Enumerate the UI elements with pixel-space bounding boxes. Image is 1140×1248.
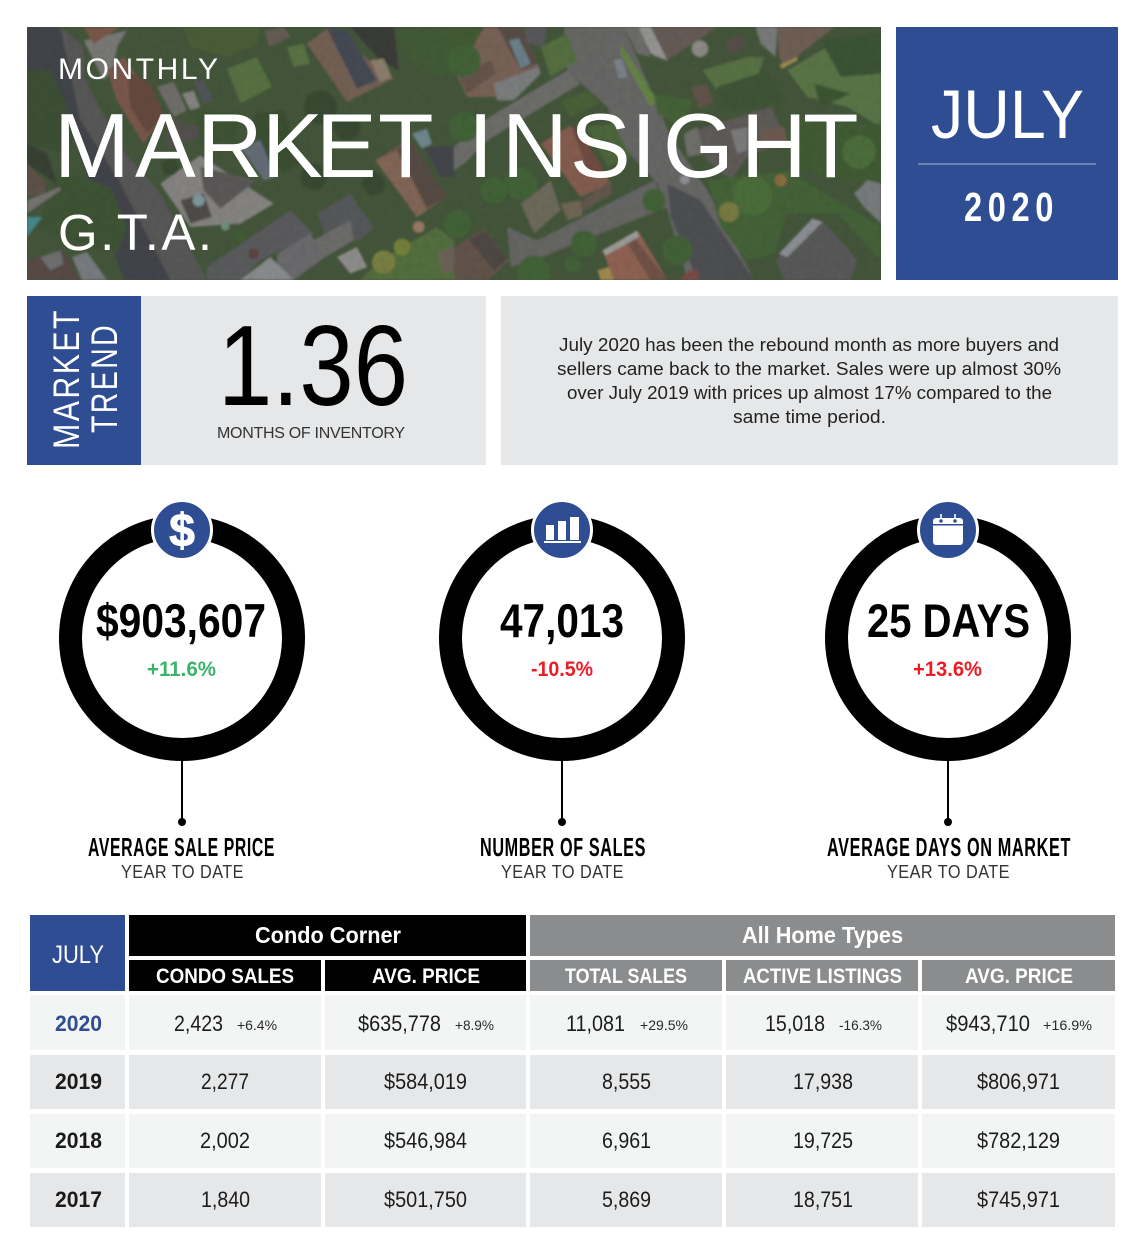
table row: 2020: $635,778 [358,1011,441,1036]
table header group: all home types [530,915,1115,991]
kpi: average days on market [827,500,1071,882]
summary paragraph [557,334,1061,427]
ring [836,526,1060,750]
sublabel: YEAR TO DATE [121,862,244,882]
table row: 2020: +8.9% [455,1017,494,1033]
table row: 2017: 1,840 [201,1187,250,1212]
summary paragraph: same time period. [733,406,886,427]
summary text panel [501,296,1118,465]
table row: 2017: 2017 [55,1187,102,1212]
market trend vertical label: MARKET [46,308,87,449]
table row: 2017: $501,750 [384,1187,467,1212]
value: 25 DAYS [867,594,1030,647]
table row: 2017: 18,751 [793,1187,853,1212]
banner label: monthly: MONTHLY [58,53,218,86]
icon: dollar sign: $ [169,504,195,556]
sublabel: YEAR TO DATE [887,862,1010,882]
change: +13.6% [913,658,982,681]
table row: 2019: 17,938 [793,1069,853,1094]
table row: 2018: $546,984 [384,1128,467,1153]
table row: 2019: $806,971 [977,1069,1060,1094]
label: NUMBER OF SALES [480,832,646,862]
aerial photo background [27,27,881,289]
icon: dollar sign [152,500,212,560]
table header group: condo corner: AVG. PRICE [372,965,480,988]
inventory value: 1.36 [218,303,408,430]
table row: 2020: 11,081 [566,1011,625,1036]
table row: 2020: -16.3% [839,1017,882,1033]
table row: 2017 [30,1173,1115,1227]
table row: 2018: 6,961 [602,1128,651,1153]
data table [30,915,1115,1227]
table row: 2017: 5,869 [602,1187,651,1212]
table header group: all home types: TOTAL SALES [565,965,687,988]
icon: bar chart [532,500,592,560]
connector [558,760,566,826]
table row: 2020: 15,018 [765,1011,825,1036]
inventory caption: MONTHS OF INVENTORY [217,425,405,442]
connector [944,760,952,826]
kpi: average sale price [70,500,294,882]
table row: 2020: 2020 [55,1011,102,1036]
table row: 2020: 2,423 [174,1011,223,1036]
table row: 2017: $745,971 [977,1187,1060,1212]
table row: 2020: +16.9% [1043,1017,1092,1033]
market trend vertical label [46,308,125,449]
table row: 2019 [30,1055,1115,1109]
table row: 2018: 19,725 [793,1128,853,1153]
table header group: all home types: ACTIVE LISTINGS [743,965,902,988]
table row: 2018: $782,129 [977,1128,1060,1153]
table header group: condo corner: Condo Corner [255,922,401,948]
table row: 2020: +6.4% [237,1017,277,1033]
summary paragraph: over July 2019 with prices up almost 17% compared to the [567,382,1052,403]
label: AVERAGE SALE PRICE [88,832,275,862]
table row: 2019: 8,555 [602,1069,651,1094]
year: 2020 [964,184,1059,230]
connector [178,760,186,826]
table row: 2020 [30,995,1115,1050]
table header: july: JULY [52,941,104,969]
table row: 2018 [30,1114,1115,1168]
table row: 2018: 2,002 [200,1128,250,1153]
sublabel: YEAR TO DATE [501,862,624,882]
table row: 2020: $943,710 [946,1011,1030,1036]
value: 47,013 [500,594,624,647]
table row: 2020: +29.5% [640,1017,688,1033]
kpi: number of sales [450,500,674,882]
month: JULY [931,76,1084,153]
table row: 2018: 2018 [55,1128,102,1153]
summary paragraph: July 2020 has been the rebound month as more buyers and [559,334,1059,355]
ring [450,526,674,750]
table header: july [30,915,125,991]
market trend vertical label: TREND [84,323,125,433]
value: $903,607 [96,594,266,647]
hero banner [27,27,881,289]
summary paragraph: sellers came back to the market. Sales were up almost 30% [557,358,1061,379]
table row: 2019: 2,277 [201,1069,249,1094]
table row: 2019: $584,019 [384,1069,467,1094]
table row: 2019: 2019 [55,1069,102,1094]
market trend panel [27,296,486,465]
banner title: market insight: MARKET INSIGHT [54,96,859,197]
table header group: condo corner [129,915,526,991]
change: -10.5% [531,658,593,681]
table header group: all home types: AVG. PRICE [965,965,1073,988]
date panel [896,27,1118,280]
table header group: condo corner: CONDO SALES [156,965,294,988]
ring [70,526,294,750]
icon: calendar [918,500,978,560]
change: +11.6% [147,658,216,681]
banner label: G.T.A.: G.T.A. [58,204,212,261]
table header group: all home types: All Home Types [742,922,903,948]
